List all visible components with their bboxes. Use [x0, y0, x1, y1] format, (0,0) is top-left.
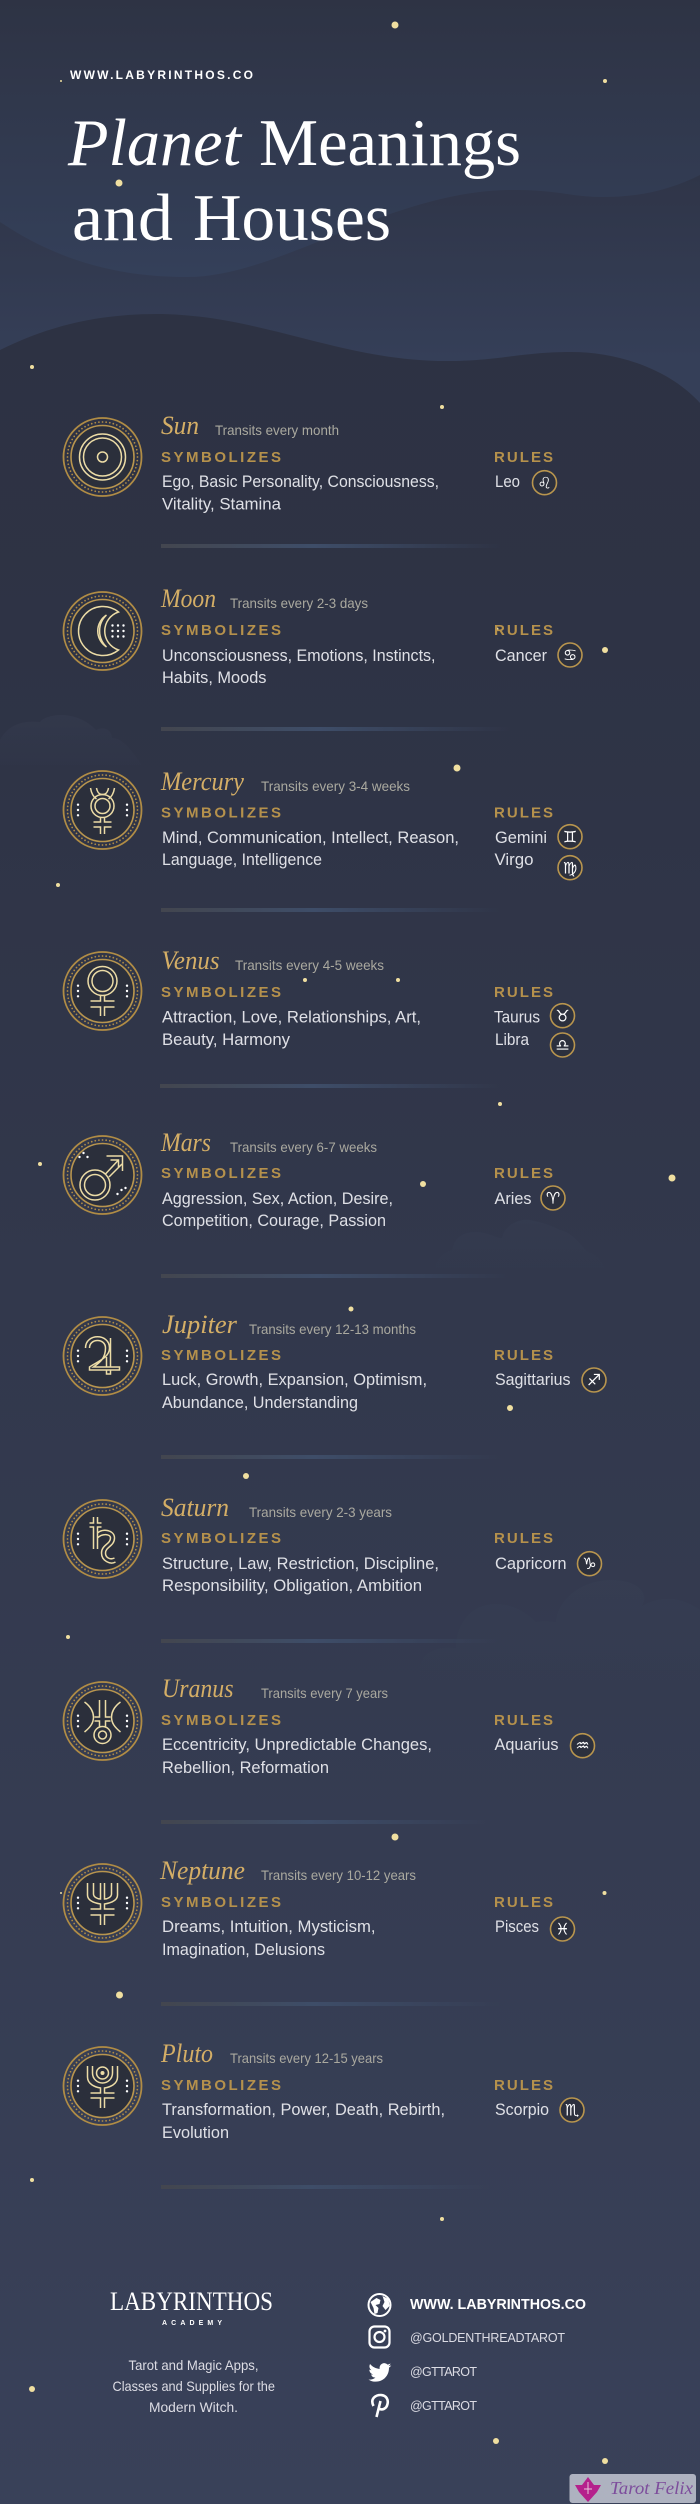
divider — [161, 727, 511, 731]
mars heading: Mars — [160, 1128, 211, 1157]
footer tagline: Classes and Supplies for the — [112, 2378, 275, 2394]
panel: saturn — [64, 1493, 602, 1595]
sun rules label: RULES — [494, 449, 553, 466]
website link: WWW. LABYRINTHOS.CO — [410, 2296, 586, 2313]
divider — [160, 1084, 500, 1088]
panel: uranus — [64, 1674, 594, 1777]
icon: jupiter medallion — [64, 1317, 142, 1395]
uranus symbolizes label: SYMBOLIZES — [161, 1712, 281, 1729]
mercury rules signs — [494, 825, 582, 880]
divider — [161, 2185, 491, 2189]
divider — [161, 2002, 501, 2006]
venus description — [162, 1008, 421, 1049]
sun heading: Sun — [161, 411, 199, 440]
sun description: Vitality, Stamina — [162, 494, 282, 514]
jupiter transit: Transits every 12-13 months — [249, 1321, 416, 1337]
mercury transit: Transits every 3-4 weeks — [261, 778, 410, 794]
moon rules label: RULES — [494, 622, 553, 639]
moon description — [162, 646, 436, 687]
saturn rules sign — [495, 1552, 602, 1576]
panel: moon — [64, 584, 582, 687]
icon: sun medallion — [64, 418, 142, 496]
jupiter heading: Jupiter — [162, 1310, 238, 1339]
uranus transit: Transits every 7 years — [261, 1685, 388, 1701]
neptune description: Dreams, Intuition, Mysticism, — [162, 1917, 376, 1936]
mercury symbolizes label: SYMBOLIZES — [161, 805, 281, 822]
pluto rules sign: Scorpio — [495, 2100, 549, 2119]
saturn transit: Transits every 2-3 years — [249, 1504, 392, 1520]
uranus rules sign: ♒︎ — [575, 1736, 590, 1755]
saturn description: Responsibility, Obligation, Ambition — [162, 1576, 422, 1595]
title — [67, 106, 521, 255]
pinterest handle: @GTTAROT — [410, 2399, 477, 2413]
moon rules sign — [495, 643, 582, 667]
mars transit: Transits every 6-7 weeks — [230, 1139, 377, 1155]
pluto description: Evolution — [162, 2123, 229, 2142]
neptune rules label: RULES — [494, 1894, 553, 1911]
moon description: Unconsciousness, Emotions, Instincts, — [162, 646, 436, 665]
saturn description: Structure, Law, Restriction, Discipline, — [162, 1554, 439, 1573]
watermark badge: Tarot Felix — [610, 2478, 693, 2498]
panel: mars — [64, 1128, 565, 1230]
icon: mars medallion — [64, 1136, 142, 1214]
venus rules signs — [494, 1004, 574, 1057]
uranus description: Eccentricity, Unpredictable Changes, — [162, 1735, 432, 1754]
title: Houses — [193, 181, 391, 255]
background wave upper — [0, 175, 700, 420]
venus heading: Venus — [162, 946, 220, 975]
sun transit: Transits every month — [215, 422, 339, 438]
mars description: Aggression, Sex, Action, Desire, — [162, 1189, 393, 1208]
header url: WWW.LABYRINTHOS.CO — [70, 68, 253, 82]
neptune rules sign: ♓︎ — [555, 1920, 570, 1938]
mercury description — [162, 828, 459, 869]
panel: sun — [64, 411, 556, 514]
title: Meanings — [259, 106, 521, 180]
icon: moon medallion — [64, 592, 142, 670]
neptune symbolizes label: SYMBOLIZES — [161, 1894, 281, 1911]
moon symbolizes label: SYMBOLIZES — [161, 622, 281, 639]
sun rules sign: Leo — [495, 472, 520, 491]
panel: mercury — [64, 767, 582, 880]
pluto rules label: RULES — [494, 2077, 553, 2094]
sun rules sign: ♌︎ — [537, 474, 552, 492]
pluto heading: Pluto — [160, 2039, 213, 2068]
panel: pluto — [64, 2039, 584, 2142]
mercury heading: Mercury — [160, 767, 244, 796]
icon: globe — [368, 2294, 390, 2316]
twitter handle: @GTTAROT — [410, 2365, 477, 2379]
venus description: Attraction, Love, Relationships, Art, — [162, 1008, 421, 1027]
venus rules signs: ♎︎ — [555, 1036, 570, 1054]
cloud middle right — [434, 1220, 606, 1272]
saturn heading: Saturn — [161, 1493, 229, 1522]
uranus rules sign — [494, 1734, 594, 1758]
divider — [161, 544, 501, 548]
venus description: Beauty, Harmony — [162, 1030, 290, 1049]
saturn rules sign: Capricorn — [495, 1554, 566, 1573]
jupiter rules sign: ♐︎ — [587, 1370, 601, 1390]
mercury rules signs: Gemini — [495, 828, 547, 847]
watermark badge — [570, 2474, 696, 2503]
mars symbolizes label: SYMBOLIZES — [161, 1165, 281, 1182]
sun rules sign — [495, 471, 556, 495]
mercury rules signs: ♊︎ — [563, 828, 577, 846]
jupiter rules sign — [495, 1368, 606, 1392]
saturn rules label: RULES — [494, 1530, 553, 1547]
uranus rules label: RULES — [494, 1712, 553, 1729]
saturn description — [162, 1554, 439, 1595]
sun description: Ego, Basic Personality, Consciousness, — [162, 472, 439, 491]
pluto rules sign: ♏︎ — [565, 2100, 579, 2120]
mercury description: Language, Intelligence — [162, 850, 322, 869]
icon: uranus medallion — [64, 1682, 142, 1760]
icon: venus medallion — [64, 952, 142, 1030]
instagram handle: @GOLDENTHREADTAROT — [410, 2331, 565, 2345]
mars description: Competition, Courage, Passion — [162, 1211, 386, 1230]
jupiter rules label: RULES — [494, 1347, 553, 1364]
footer logo — [110, 2287, 273, 2327]
neptune transit: Transits every 10-12 years — [261, 1867, 416, 1883]
uranus heading: Uranus — [162, 1674, 234, 1703]
moon transit: Transits every 2-3 days — [230, 595, 368, 611]
footer tagline — [112, 2357, 275, 2415]
divider — [161, 908, 501, 912]
mars description — [162, 1189, 393, 1230]
jupiter description: Abundance, Understanding — [162, 1393, 358, 1412]
title: Planet — [67, 106, 242, 180]
pluto description — [162, 2100, 445, 2142]
panel: jupiter — [64, 1310, 606, 1412]
moon heading: Moon — [160, 584, 216, 613]
jupiter description: Luck, Growth, Expansion, Optimism, — [162, 1370, 427, 1389]
moon rules sign: ♋︎ — [563, 646, 577, 664]
icon: pinterest — [372, 2395, 388, 2417]
pluto rules sign — [495, 2098, 584, 2122]
neptune rules sign: Pisces — [495, 1917, 539, 1936]
mars rules sign: ♈︎ — [546, 1188, 560, 1208]
footer tagline: Modern Witch. — [149, 2399, 238, 2415]
pluto transit: Transits every 12-15 years — [230, 2050, 383, 2066]
venus rules signs: ♉︎ — [555, 1006, 570, 1026]
sun symbolizes label: SYMBOLIZES — [161, 449, 281, 466]
divider — [161, 1455, 501, 1459]
mercury rules label: RULES — [494, 805, 553, 822]
uranus rules sign: Aquarius — [494, 1735, 558, 1754]
jupiter rules sign: Sagittarius — [495, 1370, 570, 1389]
mercury rules signs: ♍︎ — [563, 858, 577, 878]
neptune heading: Neptune — [159, 1856, 245, 1885]
mercury description: Mind, Communication, Intellect, Reason, — [162, 828, 459, 847]
cloud lower right — [420, 1580, 700, 1680]
cloud left — [0, 715, 142, 765]
venus symbolizes label: SYMBOLIZES — [161, 984, 281, 1001]
icon: instagram — [370, 2326, 390, 2348]
mercury rules signs: Virgo — [494, 850, 534, 869]
mars rules sign: Aries — [494, 1189, 532, 1208]
footer logo: LABYRINTHOS — [110, 2287, 273, 2316]
neptune description: Imagination, Delusions — [162, 1940, 325, 1959]
venus rules label: RULES — [494, 984, 553, 1001]
icon: saturn medallion — [64, 1500, 142, 1578]
neptune description — [162, 1917, 376, 1959]
divider — [161, 1274, 511, 1278]
jupiter description — [162, 1370, 427, 1412]
icon: neptune medallion — [64, 1864, 142, 1942]
icon: twitter — [368, 2363, 391, 2382]
moon rules sign: Cancer — [495, 646, 547, 665]
icon: pluto medallion — [64, 2047, 142, 2125]
uranus description: Rebellion, Reformation — [162, 1758, 329, 1777]
panel: neptune — [64, 1856, 574, 1959]
icon: mercury medallion — [64, 771, 142, 849]
moon description: Habits, Moods — [162, 668, 266, 687]
neptune rules sign — [495, 1917, 574, 1941]
mars rules sign — [494, 1186, 565, 1210]
venus rules signs: Taurus — [494, 1008, 540, 1027]
footer logo: ACADEMY — [162, 2320, 222, 2327]
pluto symbolizes label: SYMBOLIZES — [161, 2077, 281, 2094]
uranus description — [162, 1735, 432, 1777]
footer tagline: Tarot and Magic Apps, — [128, 2357, 258, 2373]
panel: venus — [64, 946, 574, 1057]
venus rules signs: Libra — [495, 1030, 529, 1049]
venus transit: Transits every 4-5 weeks — [235, 957, 384, 973]
mars rules label: RULES — [494, 1165, 553, 1182]
divider — [161, 1820, 491, 1824]
sun description — [162, 472, 439, 514]
saturn rules sign: ♑︎ — [582, 1554, 597, 1573]
title: and — [72, 181, 173, 255]
jupiter symbolizes label: SYMBOLIZES — [161, 1347, 281, 1364]
divider — [161, 1639, 501, 1643]
saturn symbolizes label: SYMBOLIZES — [161, 1530, 281, 1547]
pluto description: Transformation, Power, Death, Rebirth, — [162, 2100, 445, 2119]
